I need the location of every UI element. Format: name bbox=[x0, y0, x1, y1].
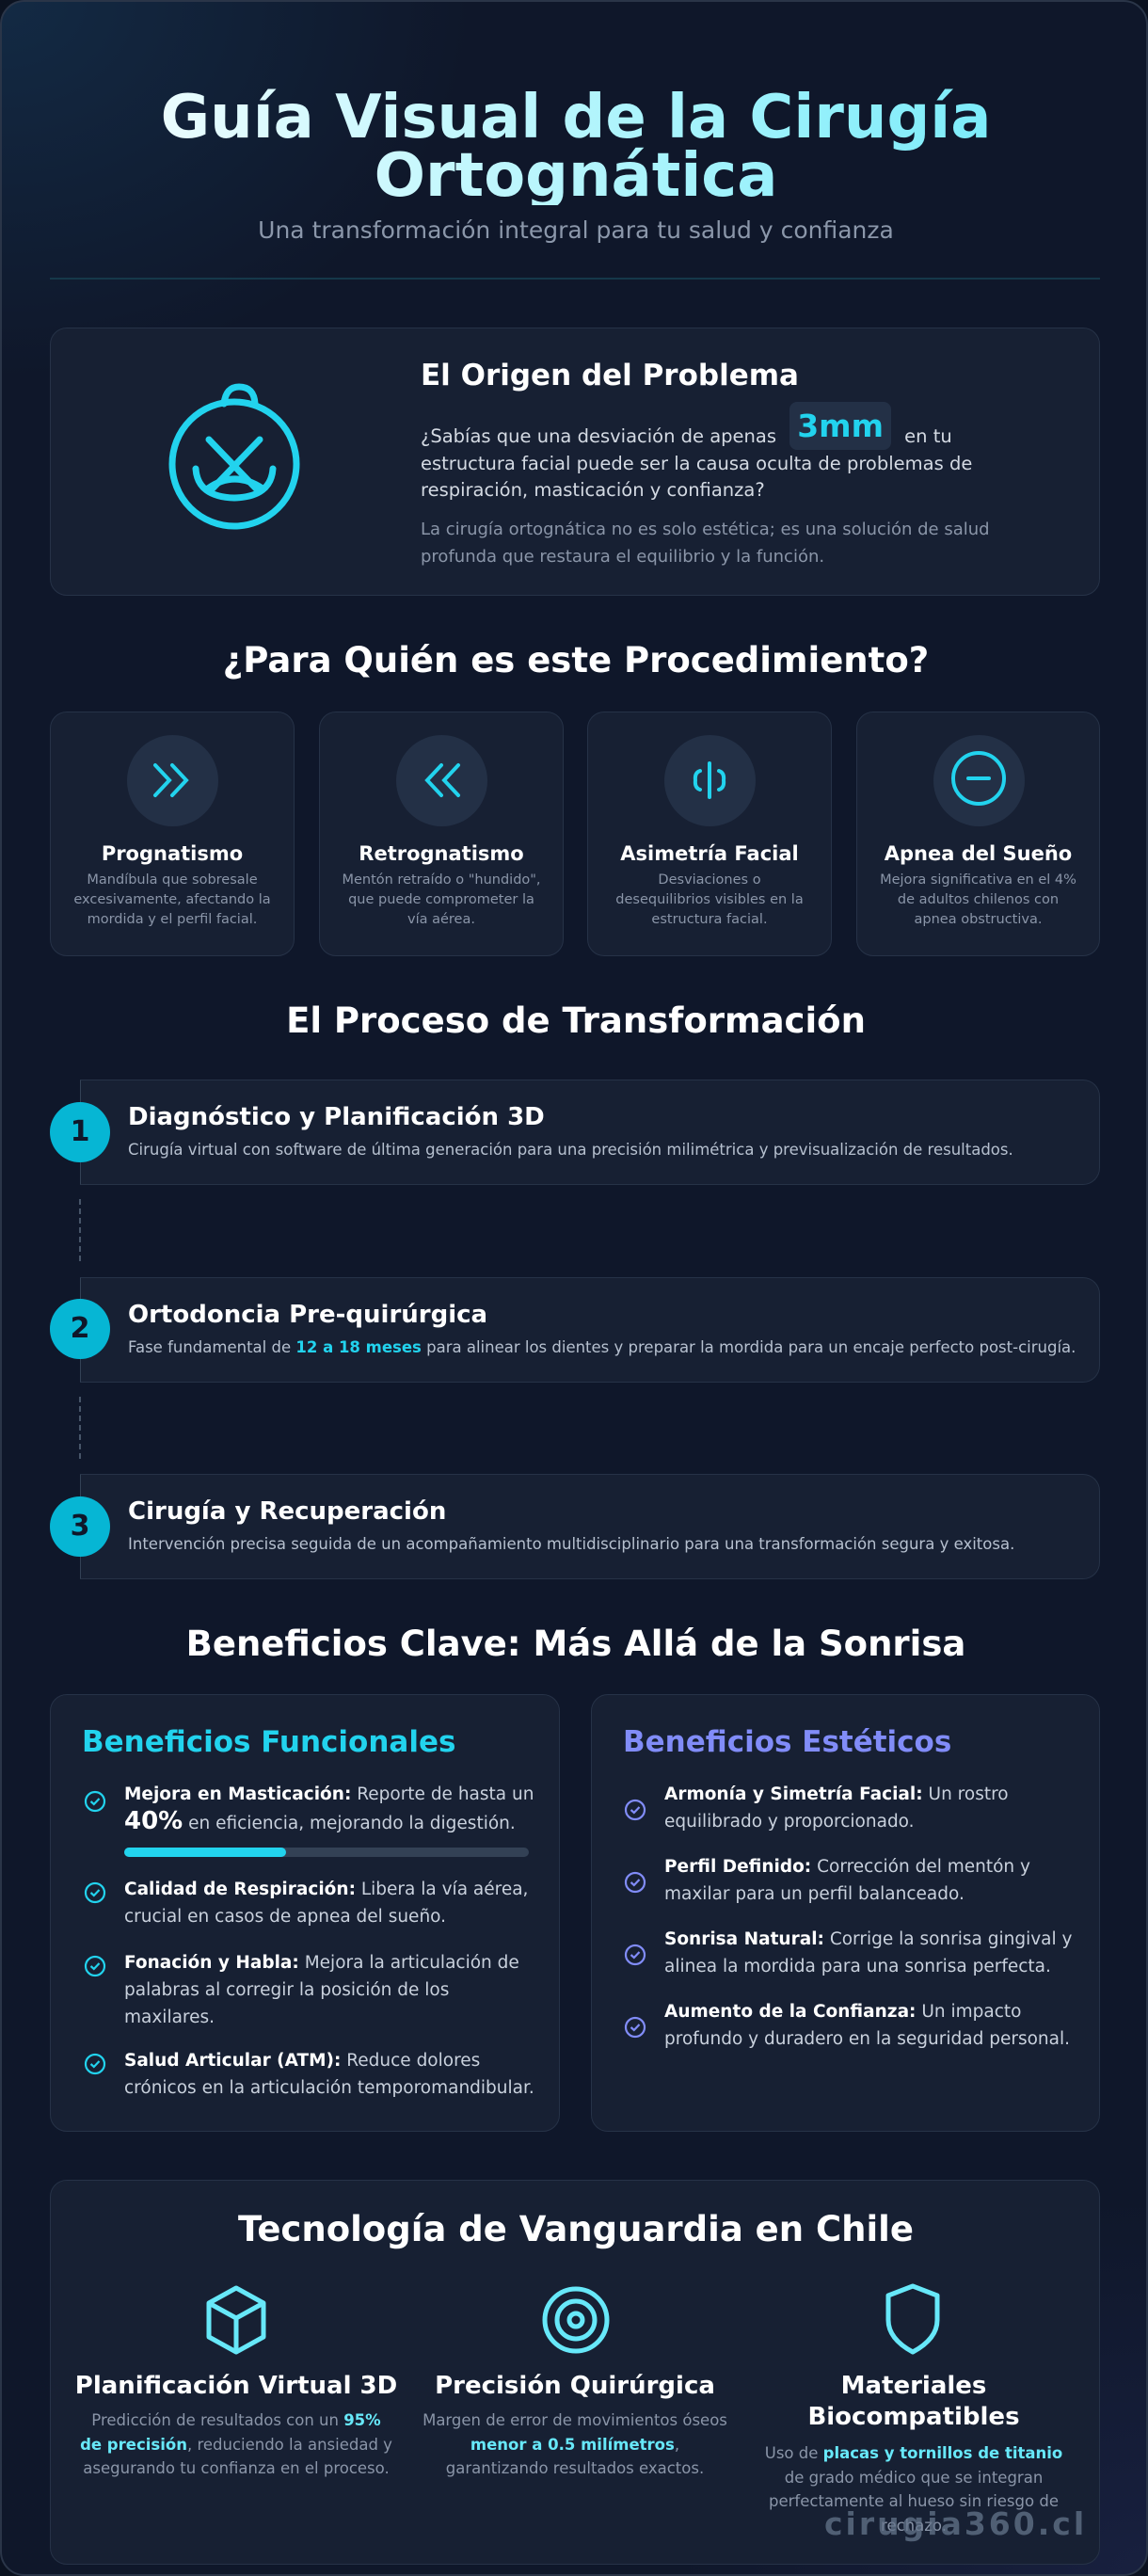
panel: tecnología bbox=[50, 2180, 1100, 2565]
heading: El Origen del Problema bbox=[421, 359, 799, 392]
panel: asimetría: Asimetría Facial bbox=[620, 842, 799, 865]
panel: tecnología: Margen de error de movimientos óseos bbox=[423, 2411, 727, 2429]
panel: prognatismo: Mandíbula que sobresale excesivamente, afectando la mordida y el perfil facial. bbox=[73, 872, 271, 927]
item: fonación bbox=[85, 1953, 519, 2027]
icon: face bbox=[169, 384, 299, 529]
number 1 bbox=[50, 1102, 110, 1162]
panel: tecnología: Planificación Virtual 3D bbox=[75, 2372, 397, 2400]
panel: beneficios estéticos: Beneficios Estéticos bbox=[623, 1725, 951, 1759]
panel: asimetría bbox=[587, 712, 832, 956]
panel: beneficios funcionales bbox=[50, 1694, 560, 2132]
panel: beneficios estéticos: Sonrisa Natural: Corrige la sonrisa gingival y alinea la mordida para una sonrisa perfecta. bbox=[664, 1929, 1072, 1976]
panel: apnea bbox=[856, 712, 1100, 956]
item: sonrisa bbox=[625, 1929, 1072, 1976]
item: armonía bbox=[625, 1784, 1009, 1832]
tech: precisión bbox=[423, 2287, 727, 2477]
heading: proceso: El Proceso de Transformación bbox=[286, 1000, 866, 1041]
watermark: cirugia360.cl bbox=[824, 2505, 1087, 2542]
item: masticación bbox=[85, 1784, 534, 1835]
panel: tecnología: perfectamente al hueso sin riesgo de rechazo. bbox=[769, 2492, 1059, 2534]
panel: beneficios funcionales: Calidad de Respiración: Libera la vía aérea, crucial en casos de apnea del sueño. bbox=[124, 1880, 528, 1927]
panel: retrognatismo: Retrognatismo bbox=[359, 842, 524, 865]
panel: origen del problema bbox=[50, 328, 1100, 596]
icon: split bbox=[664, 735, 756, 826]
icon: chevrons right bbox=[127, 735, 218, 826]
step 3: Cirugía y Recuperación bbox=[128, 1497, 446, 1526]
number 2 bbox=[50, 1299, 110, 1359]
tech: planificación bbox=[75, 2285, 397, 2477]
step 2: Ortodoncia Pre-quirúrgica bbox=[128, 1301, 487, 1329]
step 1: Diagnóstico y Planificación 3D bbox=[128, 1103, 545, 1131]
panel: tecnología: menor a 0.5 milímetros, bbox=[470, 2436, 679, 2453]
number 3: 3 bbox=[71, 1510, 89, 1543]
panel: beneficios funcionales: Beneficios Funcionales bbox=[82, 1725, 455, 1759]
step 3: Intervención precisa seguida de un acompañamiento multidisciplinario para una transformación segura y exitosa. bbox=[128, 1535, 1014, 1553]
panel: tecnología: Predicción de resultados con un 95% bbox=[91, 2411, 381, 2429]
number 3 bbox=[50, 1496, 110, 1557]
panel: beneficios estéticos: Perfil Definido: Corrección del mentón y maxilar para un perfil balanceado. bbox=[664, 1857, 1030, 1904]
panel: asimetría: desequilibrios visibles en la estructura facial. bbox=[615, 892, 804, 927]
item: perfil bbox=[625, 1857, 1030, 1904]
panel: retrognatismo bbox=[319, 712, 564, 956]
icon: cube bbox=[207, 2285, 265, 2355]
tech: materiales bbox=[765, 2283, 1062, 2534]
heading: beneficios: Beneficios Clave: Más Allá de la Sonrisa bbox=[186, 1624, 965, 1664]
step 1 bbox=[80, 1080, 1100, 1185]
panel: apnea: Mejora significativa en el 4% bbox=[880, 872, 1076, 888]
step 2: Fase fundamental de 12 a 18 meses para alinear los dientes y preparar la mordida para un encaje perfecto post-cirugía. bbox=[128, 1338, 1076, 1356]
panel: tecnología: de precisión, reduciendo la ansiedad y asegurando tu confianza en el proceso. bbox=[80, 2436, 392, 2477]
step 3 bbox=[80, 1474, 1100, 1579]
panel: tecnología: Biocompatibles bbox=[807, 2403, 1020, 2431]
item: ATM bbox=[85, 2051, 534, 2098]
icon: shield bbox=[886, 2283, 939, 2355]
panel: tecnología: Precisión Quirúrgica bbox=[435, 2372, 715, 2400]
text: subtext: La cirugía ortognática no es solo estética; es una solución de salud profunda que restaura el equilibrio y la función. bbox=[421, 520, 990, 567]
panel: tecnología: garantizando resultados exactos. bbox=[446, 2459, 704, 2477]
panel: beneficios funcionales: Fonación y Habla: Mejora la articulación de palabras al corregir la posición de los maxilares. bbox=[124, 1953, 519, 2027]
item: respiración bbox=[85, 1880, 528, 1927]
title bbox=[2, 88, 1148, 205]
icon: minus circle bbox=[933, 735, 1025, 826]
panel: retrognatismo: Mentón retraído o "hundido", que puede comprometer la vía aérea. bbox=[342, 872, 541, 927]
panel: tecnología: Uso de placas y tornillos de titanio bbox=[765, 2444, 1062, 2462]
icon: target bbox=[542, 2287, 610, 2353]
panel: beneficios funcionales: Mejora en Masticación: Reporte de hasta un 40% en eficiencia, mejorando la digestión. bbox=[124, 1784, 534, 1835]
text block: ¿Sabías que una desviación de apenas 3mm en tu estructura facial puede ser la causa oculta de problemas de respiración, masticación y confianza? bbox=[421, 408, 972, 501]
panel: prognatismo bbox=[50, 712, 295, 956]
heading: Tecnología de Vanguardia en Chile bbox=[238, 2209, 914, 2249]
panel: beneficios estéticos: Aumento de la Confianza: Un impacto profundo y duradero en la seguridad personal. bbox=[664, 2002, 1070, 2049]
panel: beneficios funcionales: Salud Articular (ATM): Reduce dolores crónicos en la articulación temporomandibular. bbox=[124, 2051, 534, 2098]
panel: prognatismo: Prognatismo bbox=[102, 842, 243, 865]
panel: apnea: apnea obstructiva. bbox=[915, 912, 1042, 927]
step 2 bbox=[80, 1277, 1100, 1383]
progress bar bbox=[124, 1848, 529, 1857]
panel: asimetría: Desviaciones o bbox=[658, 872, 761, 888]
panel: beneficios estéticos: Armonía y Simetría Facial: Un rostro equilibrado y proporcionado. bbox=[664, 1784, 1009, 1832]
title: Guía Visual de la Cirugía bbox=[161, 83, 991, 152]
heading: para quién: ¿Para Quién es este Procedimiento? bbox=[223, 640, 929, 680]
item: confianza bbox=[625, 2002, 1070, 2049]
number 1: 1 bbox=[71, 1115, 89, 1148]
subtitle: Una transformación integral para tu salud y confianza bbox=[258, 216, 894, 244]
number 2: 2 bbox=[71, 1312, 89, 1345]
panel: beneficios estéticos bbox=[591, 1694, 1100, 2132]
title: Ortognática bbox=[375, 141, 777, 211]
icon: chevrons left bbox=[396, 735, 487, 826]
panel: apnea: Apnea del Sueño bbox=[885, 842, 1072, 865]
step 1: Cirugía virtual con software de última generación para una precisión milimétrica y previsualización de resultados. bbox=[128, 1141, 1013, 1159]
panel: apnea: de adultos chilenos con bbox=[898, 892, 1059, 907]
panel: tecnología: Materiales bbox=[841, 2372, 986, 2400]
panel: tecnología: de grado médico que se integran bbox=[785, 2468, 1043, 2487]
